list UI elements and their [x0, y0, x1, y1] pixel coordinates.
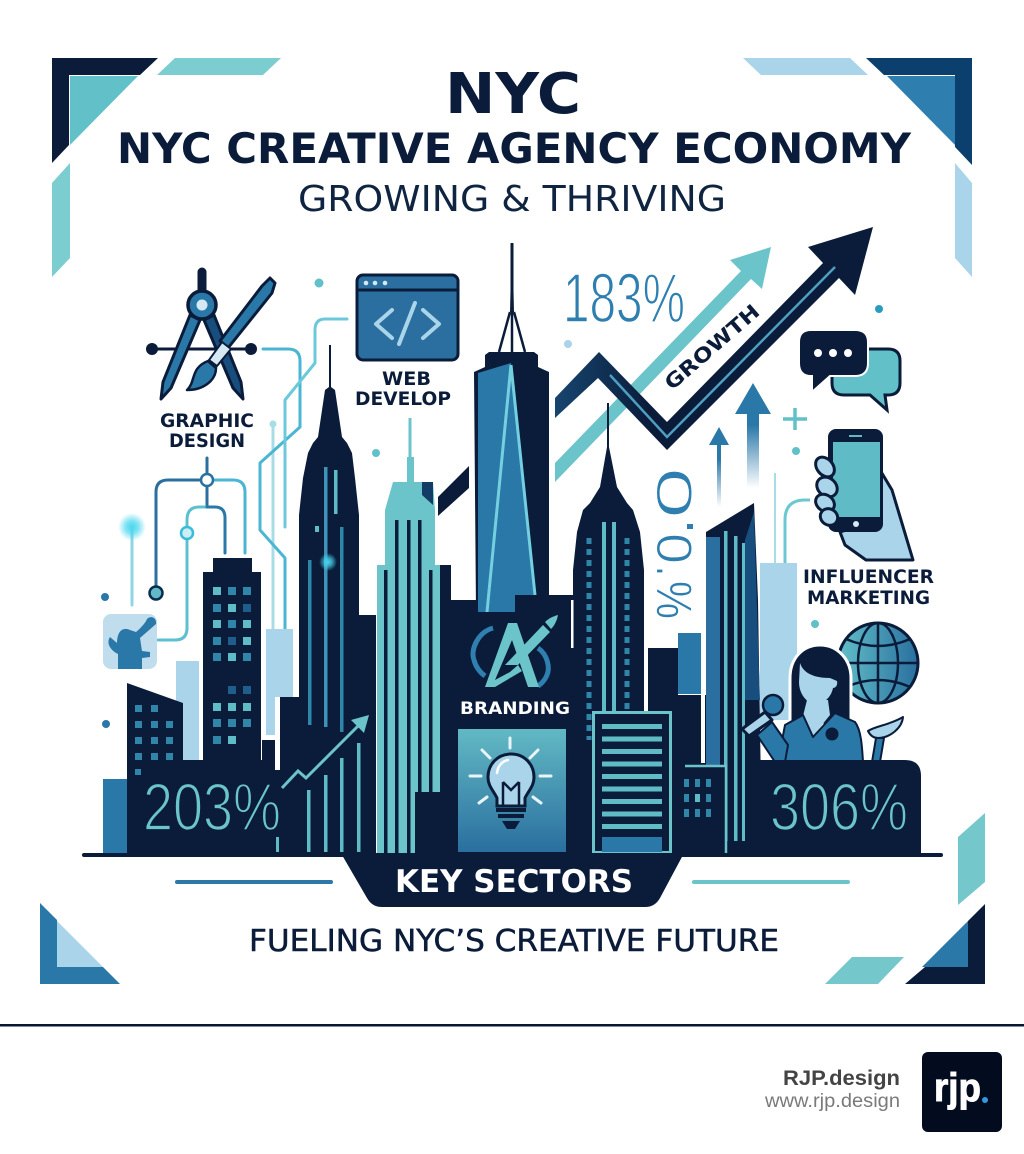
label: influencer marketing: INFLUENCER: [803, 567, 934, 588]
ground line: [82, 853, 943, 857]
chart: navy growth arrow: [555, 227, 873, 450]
stat: rotated 0.0%: 0: [646, 533, 702, 564]
stat: rotated 0.0%: %: [646, 581, 702, 619]
building: teal tower: [377, 418, 473, 853]
label: branding: BRANDING: [460, 699, 570, 719]
footer: brand text: [764, 1067, 900, 1112]
heading: creative agency economy: NYC CREATIVE AGENCY ECONOMY: [117, 124, 912, 173]
stat: 306%: 306%: [770, 770, 908, 845]
label: influencer marketing: MARKETING: [807, 588, 930, 609]
corner frame: bottom right: [825, 813, 985, 984]
title: NYC: NYC: [445, 62, 581, 127]
label: influencer marketing: [803, 567, 934, 609]
accent rules: [175, 880, 850, 884]
building: windowed tower: [203, 558, 261, 853]
circuit lines: [132, 319, 347, 640]
stat: rotated 0.0%: [646, 467, 702, 619]
stat: rotated 0.0%: .: [646, 567, 702, 575]
footer: logo: [922, 1052, 1002, 1132]
icon: graphic design compass and brush: [146, 272, 275, 399]
building: small window block: [684, 766, 726, 853]
building: striped block: [594, 712, 670, 852]
stat: 183%: 183%: [563, 259, 685, 337]
icon: hand holding phone: [785, 429, 913, 563]
chart: teal growth arrow: [555, 247, 771, 482]
icon: woman with microphone: [742, 645, 903, 762]
building: light backdrop blocks: [103, 473, 797, 853]
subtitle: GROWING & THRIVING: [298, 179, 726, 220]
banner: key sectors: KEY SECTORS: [395, 864, 633, 900]
icon: person tile: [103, 614, 157, 669]
footer: brand text: RJP.design: [783, 1067, 900, 1090]
banner: key sectors: [342, 855, 683, 907]
label: graphic design: GRAPHIC: [160, 410, 254, 432]
icon: web browser: [357, 275, 458, 360]
panel: branding block: [451, 595, 575, 853]
building: low left: [127, 683, 300, 853]
panel: 306 percent: [752, 760, 921, 853]
footer rule: [0, 1024, 1024, 1026]
footer: logo: rjp: [934, 1066, 981, 1110]
label: growth: GROWTH: [660, 299, 764, 395]
stat: 203%: 203%: [143, 770, 281, 845]
stat: rotated 0.0%: 0: [646, 467, 702, 519]
building: right backdrop blocks: [648, 633, 707, 853]
corner frame: bottom left: [40, 903, 120, 984]
label: web develop: [355, 368, 451, 410]
decorative dots: [101, 278, 883, 728]
circuit nodes: [118, 474, 213, 600]
label: web develop: WEB: [382, 368, 431, 390]
icon: branding mark: [473, 615, 558, 687]
tagline: FUELING NYC’S CREATIVE FUTURE: [249, 924, 779, 959]
skyline: [103, 243, 921, 853]
label: graphic design: [160, 410, 254, 452]
icon: chat bubbles: [799, 330, 900, 410]
building: central tower: [474, 243, 549, 612]
label: web develop: DEVELOP: [355, 388, 451, 410]
corner frame: top right: [743, 58, 972, 277]
label: graphic design: DESIGN: [169, 430, 245, 452]
icon: small up arrows: [709, 383, 807, 507]
corner frame: top left: [52, 58, 281, 277]
building: right angled tower: [706, 503, 762, 853]
panel: light bulb tile: [458, 729, 566, 852]
building: left spire tower: [276, 345, 376, 853]
building: right spire tower: [571, 403, 644, 853]
footer: brand text: www.rjp.design: [764, 1091, 900, 1112]
icon: globe: [838, 623, 918, 703]
